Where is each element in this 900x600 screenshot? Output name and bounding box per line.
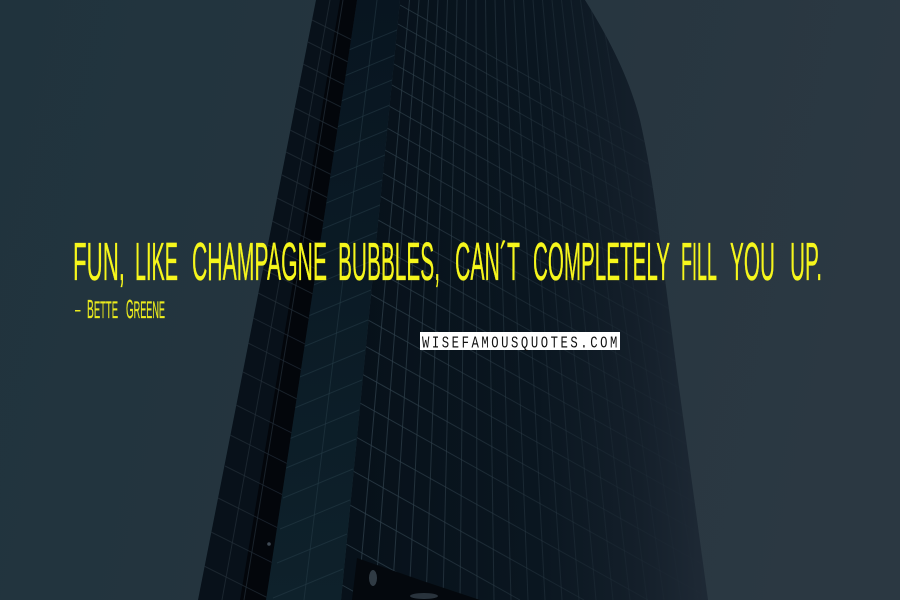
quote text: CHAMPAGNE	[192, 232, 327, 292]
quote text: FUN,	[73, 232, 125, 292]
quote text: COMPLETELY	[533, 232, 670, 292]
quote text	[73, 232, 822, 292]
quote text: FILL	[681, 232, 717, 292]
quote text: CAN´T	[455, 232, 520, 292]
dark left building facade	[198, 0, 357, 600]
building entrance shadow	[267, 542, 480, 600]
middle building facade	[266, 0, 400, 600]
quote text: LIKE	[135, 232, 178, 292]
quote poster: UP.	[790, 232, 822, 292]
attribution: BETTE	[87, 294, 118, 324]
quote text: YOU	[730, 232, 775, 292]
skyscraper	[198, 0, 740, 600]
quote text: BUBBLES,	[338, 232, 440, 292]
right building facade	[341, 0, 740, 600]
quote poster: GREENE	[126, 294, 165, 324]
watermark badge: WISEFAMOUSQUOTES.COM	[422, 335, 620, 353]
